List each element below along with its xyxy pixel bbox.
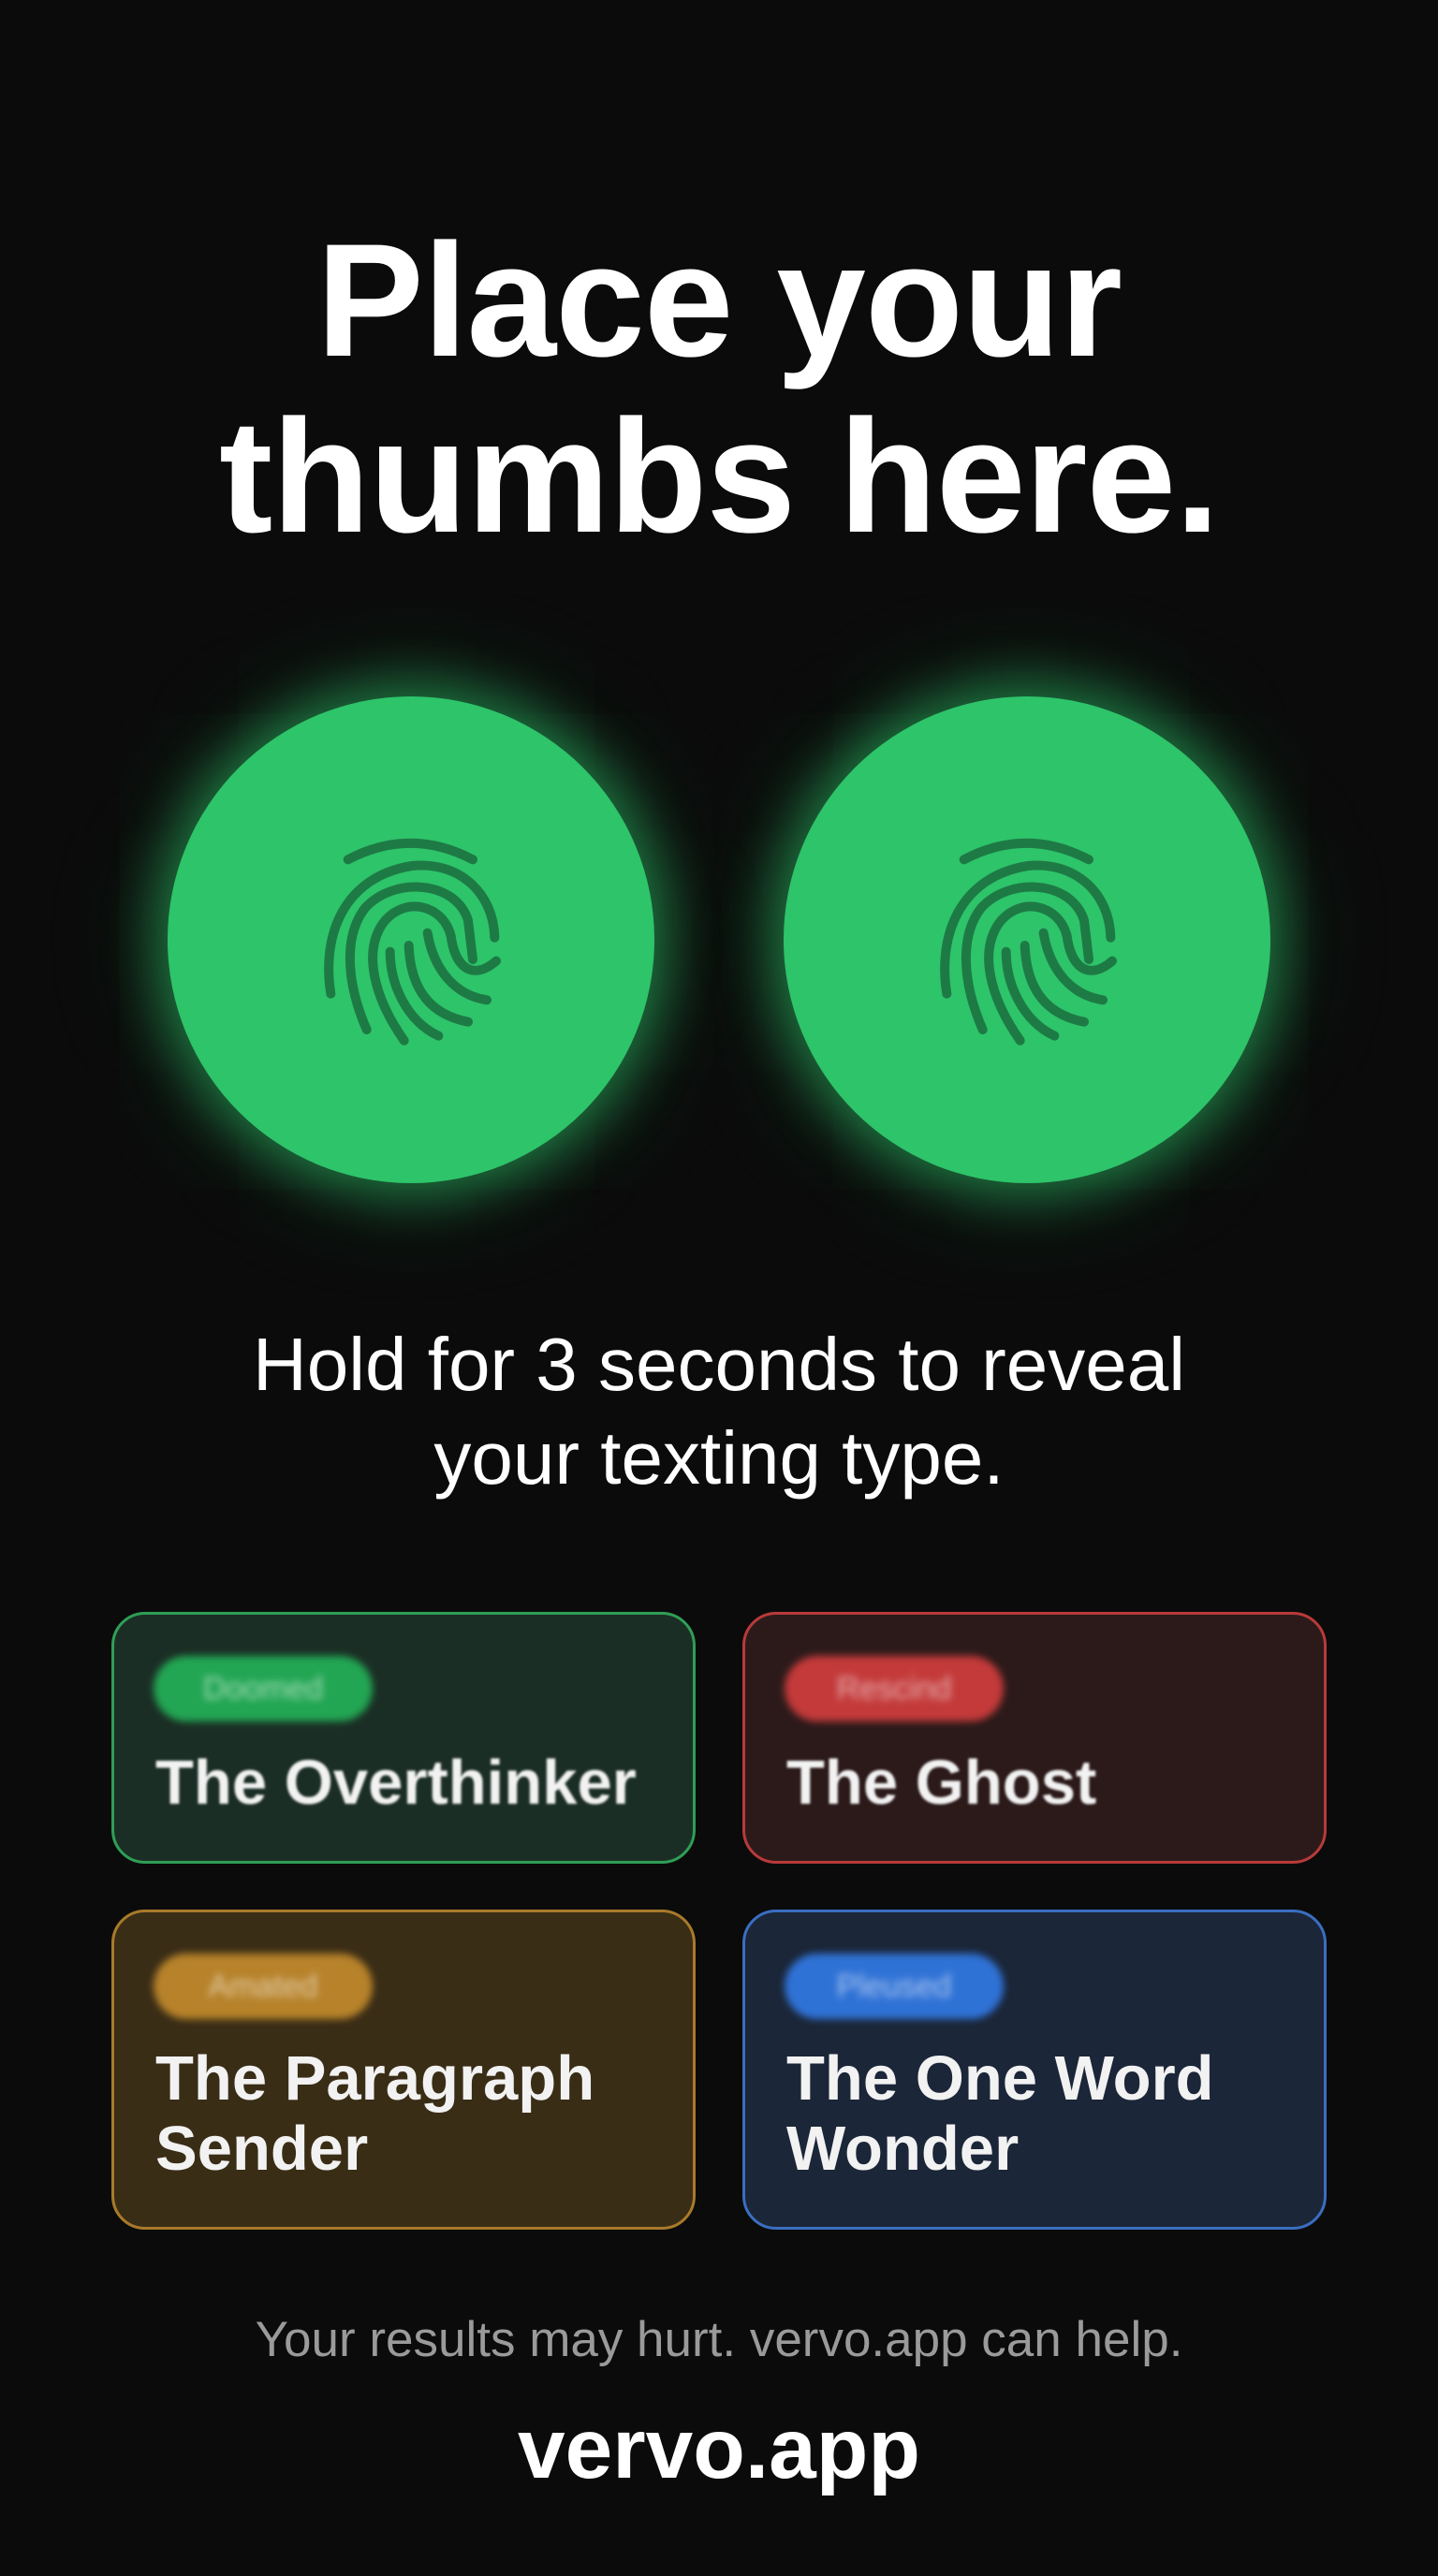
title: Place your [316,211,1122,390]
icon: left thumb circle with fingerprint [168,696,654,1183]
pill: amber label: Amated [208,1969,318,2004]
card title: The One Word [786,2043,1214,2114]
pill: green label [154,1656,373,1721]
card title: Wonder [786,2114,1019,2184]
pill: blue label [785,1954,1004,2019]
card title: The Paragraph [155,2043,594,2114]
pill: green label: Doomed [203,1671,323,1706]
icon: right thumb circle with fingerprint [784,696,1270,1183]
pill: amber label [154,1954,373,2019]
card title: Sender [155,2114,368,2184]
subtitle: your texting type. [433,1416,1005,1500]
title: thumbs here. [219,387,1219,566]
card: The Ghost [742,1612,1327,1864]
pill: red label [785,1656,1004,1721]
card title: The Ghost [786,1748,1096,1818]
pill: red label: Rescind [837,1671,951,1706]
card title [786,2043,1214,2184]
card: The One Word Wonder [742,1910,1327,2230]
title [219,211,1219,566]
brand url: vervo.app [518,2402,920,2496]
subtitle [253,1323,1185,1500]
pill: blue label: Pleused [837,1969,951,2004]
card: The Overthinker [111,1612,696,1864]
card title [155,2043,594,2184]
card: The Paragraph Sender [111,1910,696,2230]
card title: The Overthinker [155,1748,637,1818]
footer note: Your results may hurt. vervo.app can help. [256,2312,1182,2367]
subtitle: Hold for 3 seconds to reveal [253,1323,1185,1406]
